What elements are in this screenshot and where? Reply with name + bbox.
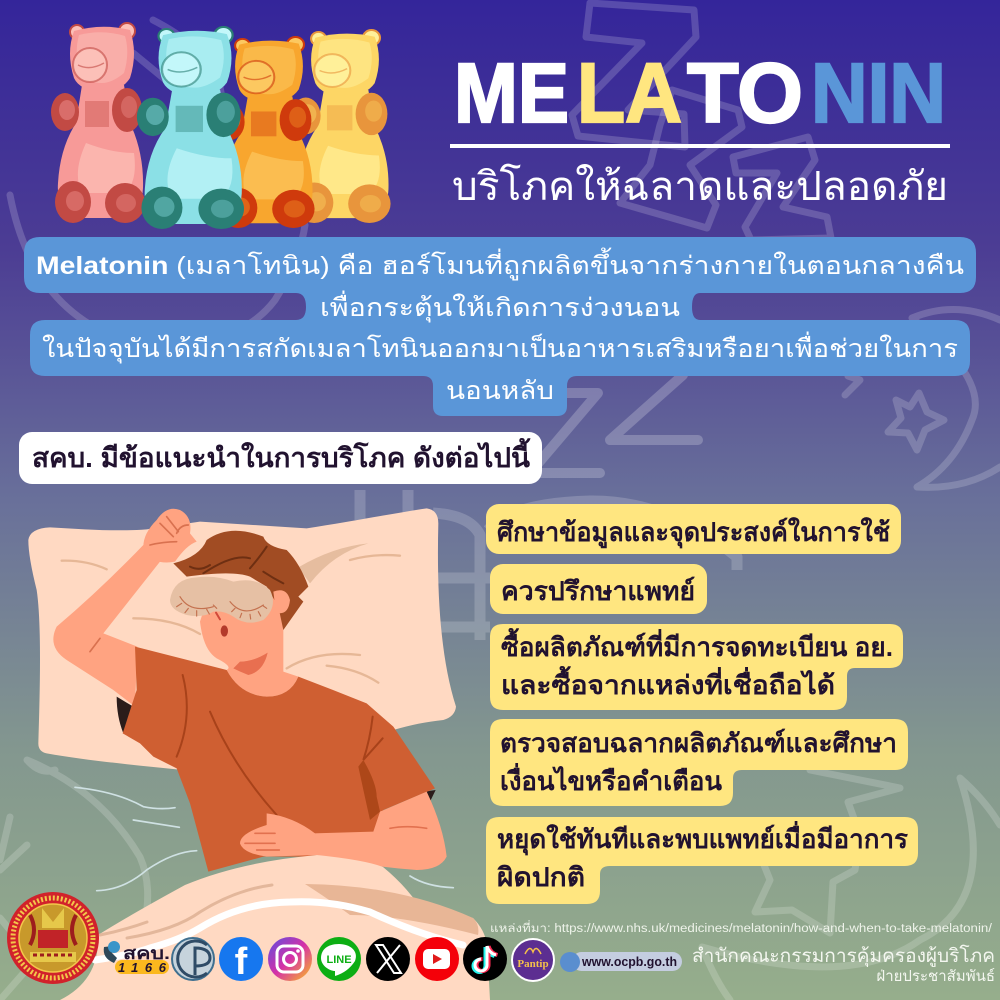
- yellow gummy bear: [291, 30, 391, 223]
- motion lines: [75, 787, 453, 891]
- tip 4: เงื่อนไขหรือคำเตือน: [500, 762, 722, 796]
- icon: X: [366, 937, 410, 981]
- icon: LINE: [317, 937, 361, 981]
- blue text backgrounds: [24, 237, 976, 416]
- mouth: [221, 625, 228, 637]
- shirt folds: [177, 675, 383, 815]
- definition line 3: ในปัจจุบันได้มีการสกัดเมลาโทนินออกมาเป็นอาหารเสริมหรือยาเพื่อช่วยในการ: [42, 331, 958, 364]
- dark shadow: [117, 697, 436, 823]
- tip 4: ตรวจสอบฉลากผลิตภัณฑ์และศึกษา: [500, 728, 897, 758]
- tip 3: และซื้อจากแหล่งที่เชื่อถือได้: [501, 665, 835, 700]
- icon: LINE: LINE: [326, 954, 352, 966]
- white blanket stripe: [95, 902, 463, 960]
- tip 3: [490, 624, 903, 710]
- hotline logo: 1166: [118, 960, 167, 975]
- t-shirt: [123, 647, 435, 872]
- hair: [173, 531, 308, 630]
- pillow: [28, 508, 456, 769]
- raised arm: [53, 545, 160, 707]
- blanket folds: [305, 884, 478, 935]
- title: MELATONIN: [454, 46, 946, 140]
- department name: ฝ่ายประชาสัมพันธ์: [876, 968, 995, 985]
- website badge: [560, 952, 682, 972]
- icon: Pantip: Pantip: [517, 958, 549, 970]
- title: MELATONIN: ME: [454, 46, 569, 140]
- red gummy bear: [51, 23, 145, 223]
- tip 4: [490, 719, 908, 806]
- title: MELATONIN: LA: [577, 46, 682, 140]
- illustration: sleeping man: [28, 508, 456, 891]
- definition line 4: นอนหลับ: [446, 377, 554, 405]
- icon: TikTok: [463, 937, 507, 981]
- sleep mask: [170, 577, 273, 623]
- mask eyelashes: [177, 597, 267, 619]
- icon: instagram: [268, 937, 312, 981]
- orange gummy bear: [215, 37, 315, 228]
- source citation: แหล่งที่มา: https://www.nhs.uk/medicines/melatonin/how-and-when-to-take-melatonin/: [490, 920, 993, 935]
- icon: facebook: f: [235, 941, 248, 983]
- tip 5: ผิดปกติ: [497, 862, 585, 892]
- icon: facebook: [219, 937, 263, 983]
- title: MELATONIN: TO: [687, 46, 803, 140]
- hotline logo: สคบ.: [123, 944, 170, 963]
- tip 2: [490, 564, 707, 614]
- icon: YouTube: [415, 937, 459, 981]
- tip 5: [486, 817, 918, 904]
- gummy bears image: [51, 23, 391, 229]
- tip 5: หยุดใช้ทันทีและพบแพทย์เมื่อมีอาการ: [497, 820, 908, 856]
- title: MELATONIN: NIN: [811, 46, 946, 140]
- lower arm: [313, 792, 447, 870]
- neck and face: [200, 580, 298, 697]
- panel: advice heading: [19, 432, 542, 484]
- icon: Pantip: [512, 939, 554, 981]
- hotline logo: [104, 941, 170, 975]
- tip 2: ควรปรึกษาแพทย์: [501, 576, 695, 606]
- blue gummy bear: [137, 27, 244, 229]
- tip 1: ศึกษาข้อมูลและจุดประสงค์ในการใช้: [497, 517, 890, 549]
- smile: [233, 653, 268, 675]
- fist: [143, 509, 197, 563]
- title underline: [450, 144, 950, 148]
- definition line 1: Melatonin (เมลาโทนิน) คือ ฮอร์โมนที่ถูกผลิตขึ้นจากร่างกายในตอนกลางคืน: [36, 247, 964, 281]
- definition line 2: เพื่อกระตุ้นให้เกิดการง่วงนอน: [320, 290, 680, 323]
- ear: [273, 590, 290, 613]
- tip 1: [486, 504, 901, 554]
- subtitle: บริโภคให้ฉลาดและปลอดภัย: [452, 163, 948, 209]
- fist lines: [90, 517, 188, 652]
- panel: melatonin definition: [24, 237, 976, 416]
- seal of the consumer protection board: [7, 892, 99, 984]
- OCPB logo: [172, 938, 214, 980]
- footer logos: [7, 892, 682, 984]
- office name: สำนักคณะกรรมการคุ้มครองผู้บริโภค: [692, 944, 995, 968]
- hand on belly: [240, 813, 318, 857]
- website badge: www.ocpb.go.th: [581, 955, 677, 969]
- panel: advice heading: สคบ. มีข้อแนะนำในการบริโภค ดังต่อไปนี้: [32, 437, 531, 473]
- nose mark: [216, 613, 220, 619]
- pillow creases: [62, 555, 400, 683]
- tip 3: ซื้อผลิตภัณฑ์ที่มีการจดทะเบียน อย.: [501, 627, 893, 662]
- blanket: [60, 855, 490, 1000]
